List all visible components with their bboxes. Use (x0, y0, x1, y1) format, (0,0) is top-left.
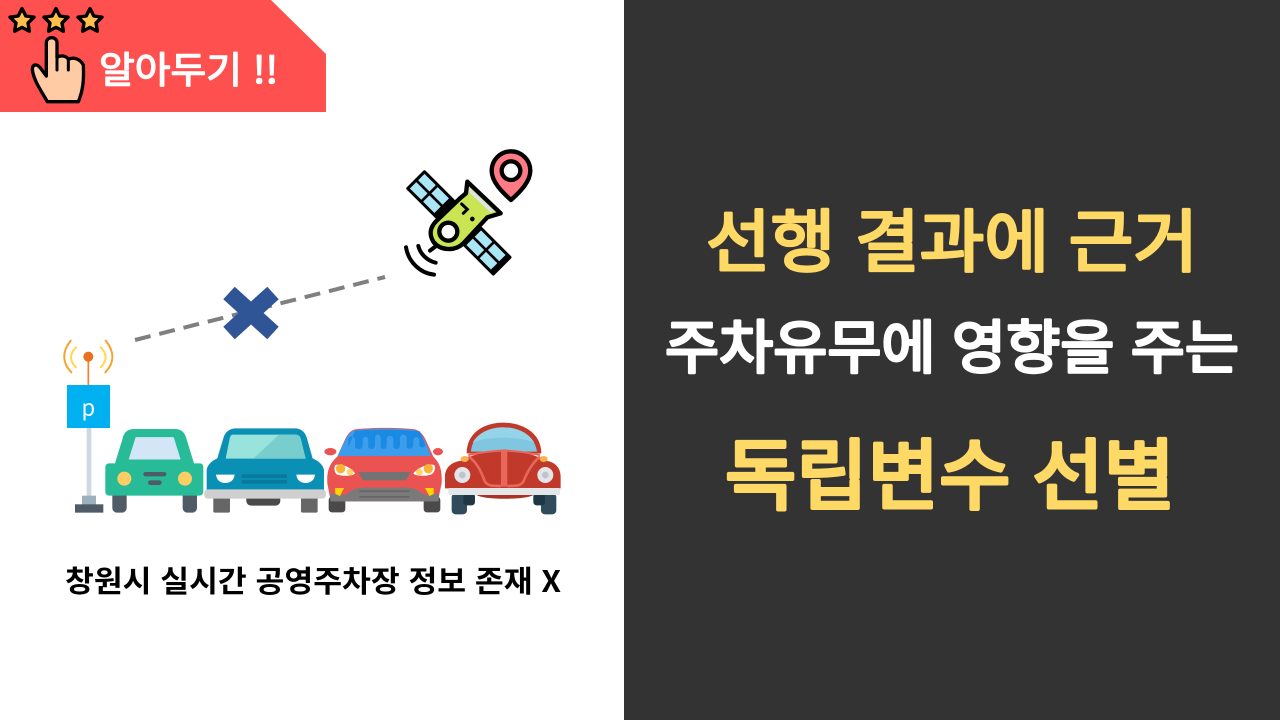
banner label: 알아두기 !! (99, 40, 278, 94)
icon: red beetle car (445, 423, 561, 514)
icon: pointing hand (32, 38, 84, 102)
solar panels (406, 170, 512, 276)
dashed signal line (135, 277, 385, 340)
satellite dish strip (469, 187, 495, 213)
satellite body (431, 182, 501, 249)
text: 주차유무에 영향을 주는: 주차유무에 영향을 주는 (665, 301, 1239, 385)
banner: 알아두기 (0, 0, 326, 112)
panel: dark right panel (624, 0, 1280, 720)
heading: 선행 결과에 근거: 선행 결과에 근거 (706, 187, 1198, 286)
icon: teal car (204, 428, 326, 513)
icon: blue X mark (229, 293, 273, 333)
icon: red sports car (324, 428, 443, 512)
heading: 독립변수 선별: 독립변수 선별 (725, 415, 1175, 526)
icon: parking sign with antenna (64, 341, 112, 513)
caption: 창원시 실시간 공영주차장 정보 존재 X: 창원시 실시간 공영주차장 정보 존재 X (65, 557, 561, 601)
icon: green car (105, 429, 203, 513)
icon: three stars (10, 8, 102, 31)
icon: location pin (492, 151, 530, 200)
icon: satellite with location pin (406, 151, 530, 276)
signal waves (406, 246, 436, 275)
sign letter: p (82, 390, 95, 422)
